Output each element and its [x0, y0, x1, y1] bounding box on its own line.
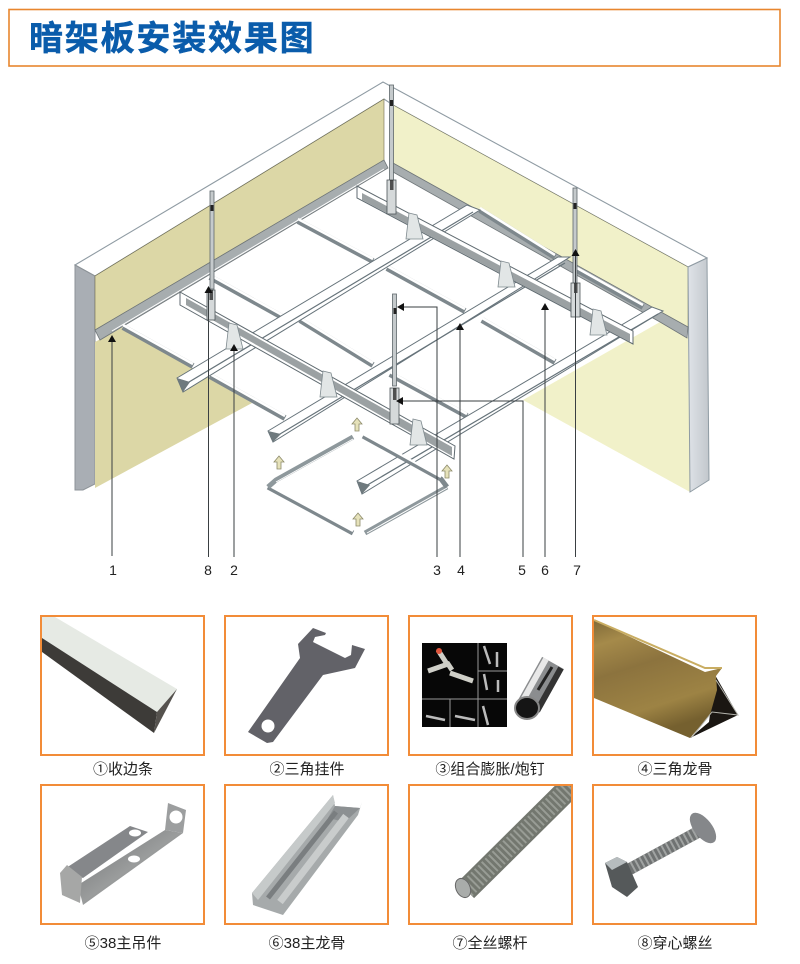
callout numbers: 4 — [457, 562, 465, 578]
icon: edge strip — [42, 617, 177, 733]
triangle hangers — [226, 213, 607, 445]
triangular keel 2 — [268, 257, 570, 442]
leader line 3 — [397, 303, 437, 557]
edge strip: right wall — [393, 163, 688, 338]
callout numbers: 3 — [433, 562, 441, 578]
ceiling installation diagram — [75, 82, 709, 578]
callout numbers: 6 — [541, 562, 549, 578]
caption: ①收边条 — [93, 761, 153, 778]
triangular keel 1 — [177, 205, 480, 392]
secondary cross tees — [123, 208, 643, 418]
panel: part 3 expansion bolts — [409, 616, 572, 778]
caption: ④三角龙骨 — [637, 761, 713, 778]
icon: expansion sleeve — [515, 659, 561, 719]
leader line 1 — [108, 335, 116, 556]
suspension rod: back — [387, 85, 396, 214]
caption: ⑥38主龙骨 — [269, 935, 345, 952]
icon: threaded rod — [452, 782, 575, 900]
icon: bracket — [60, 803, 186, 905]
icon: gold keel — [594, 620, 738, 738]
icon: fittings photo — [422, 643, 507, 727]
panel: part 2 triangle hanger — [225, 616, 388, 778]
callout numbers: 8 — [204, 562, 212, 578]
caption: ⑦全丝螺杆 — [452, 934, 528, 952]
caption: ③组合膨胀/炮钉 — [435, 761, 545, 778]
caption: ⑤38主吊件 — [85, 935, 161, 952]
title: 暗架板安装效果图 — [29, 20, 315, 58]
upward arrows — [274, 418, 452, 526]
panel: part 1 edge strip — [41, 616, 204, 778]
leader line 8 — [204, 286, 212, 557]
panel: part 4 triangular keel — [593, 616, 756, 778]
caption: ②三角挂件 — [269, 761, 345, 778]
main keel: front — [180, 292, 455, 459]
edge strip: left wall — [95, 160, 388, 340]
icon: triangle hanger — [248, 628, 365, 743]
suspension rod: centre — [390, 294, 399, 424]
wall: right pale upper — [393, 105, 688, 327]
callout numbers: 7 — [573, 562, 581, 578]
leader line 6 — [541, 303, 549, 557]
wall: right pale lower — [523, 322, 690, 492]
wall: left end face — [75, 265, 95, 490]
suspension rod: left — [207, 191, 215, 320]
wall: left khaki lower — [95, 327, 252, 488]
leader line 2 — [230, 344, 238, 557]
leader line 5 — [396, 397, 523, 557]
panel frame exploded — [268, 434, 447, 533]
callout numbers: 1 — [109, 562, 117, 578]
leader line 4 — [456, 323, 464, 557]
panel: part 7 threaded rod — [409, 782, 575, 952]
main keel: back — [357, 186, 633, 344]
panel: part 5 main hanger — [41, 785, 204, 952]
wall: right end face — [688, 258, 709, 492]
icon: U channel — [252, 795, 362, 915]
callout numbers: 5 — [518, 562, 526, 578]
triangular keel 3 — [357, 307, 663, 494]
caption: ⑧穿心螺丝 — [637, 935, 713, 952]
suspension rod: right — [571, 188, 580, 317]
wall: left khaki upper — [95, 99, 384, 330]
icon: through bolt — [605, 808, 721, 897]
panel: part 8 through bolt — [593, 785, 756, 952]
leader line 7 — [572, 249, 580, 557]
callout numbers: 2 — [230, 562, 238, 578]
panel: part 6 main keel — [225, 785, 388, 952]
wall: outer top outline — [75, 82, 707, 276]
title banner — [9, 10, 780, 66]
callout numbers — [109, 562, 581, 578]
